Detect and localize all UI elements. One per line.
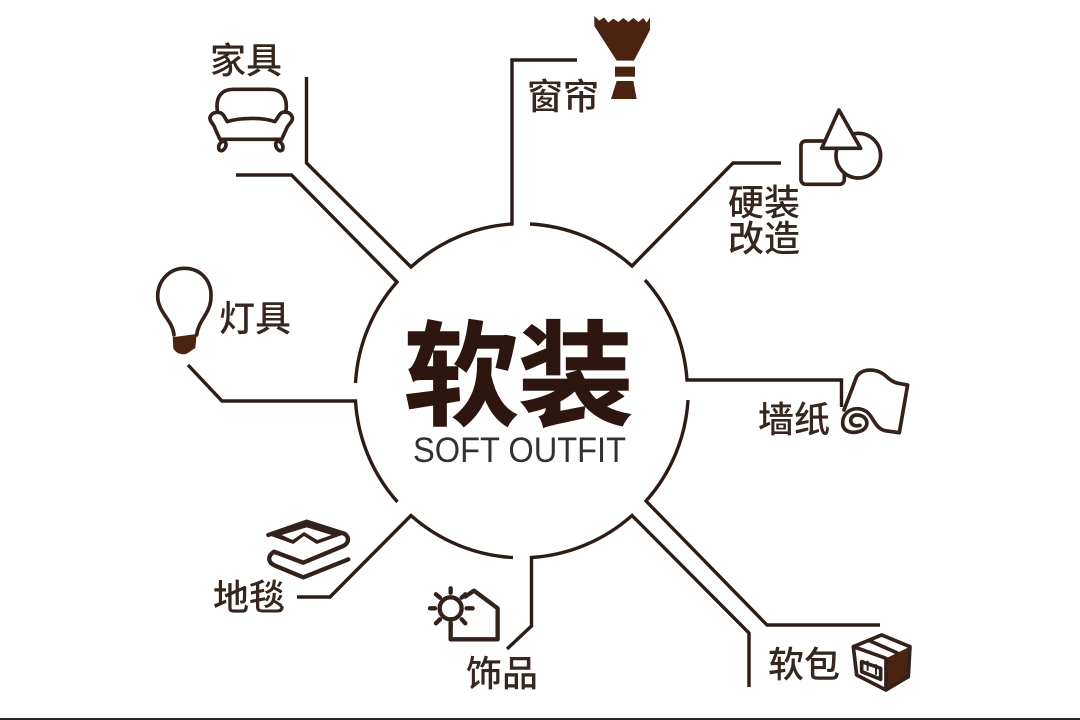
label: curtains: 窗帘	[527, 76, 599, 117]
icon: wallpaper roll	[843, 370, 908, 433]
icon: curtain	[594, 16, 650, 99]
connector: hard renovation line and top-right ring segment	[530, 163, 781, 266]
label: carpet: 地毯	[213, 577, 285, 618]
connector: wallpaper line and right-upper ring segment	[645, 280, 842, 407]
label: ornaments: 饰品	[466, 653, 538, 694]
title: 软装: 软装	[404, 314, 633, 440]
icon: light bulb	[158, 268, 211, 354]
icon: sofa	[210, 89, 292, 152]
connector: carpet line and bottom-left ring segment	[297, 516, 513, 597]
label: wallpaper: 墙纸	[758, 399, 830, 440]
subtitle: SOFT OUTFIT: SOFT OUTFIT	[413, 431, 626, 470]
icon: box	[853, 635, 910, 690]
connector: ornaments and soft bag ring segment	[507, 516, 749, 687]
connector: furniture lower line and left ring segment	[236, 175, 397, 383]
icon: sun and house	[430, 588, 498, 639]
label: soft bag: 软包	[768, 644, 840, 685]
label: hard renovation line two: 改造	[728, 218, 800, 259]
icon: rug stack	[268, 522, 348, 577]
connector: soft bag upper line and right-lower ring segment	[646, 400, 880, 625]
label: furniture: 家具	[210, 40, 282, 81]
label: hard renovation line one: 硬装	[728, 182, 800, 223]
connector: lamp line and left-lower ring segment	[188, 365, 398, 502]
icon: geometric shapes	[801, 110, 881, 184]
label: lamps: 灯具	[219, 298, 291, 339]
connector: furniture and curtains ring segment	[306, 60, 577, 267]
